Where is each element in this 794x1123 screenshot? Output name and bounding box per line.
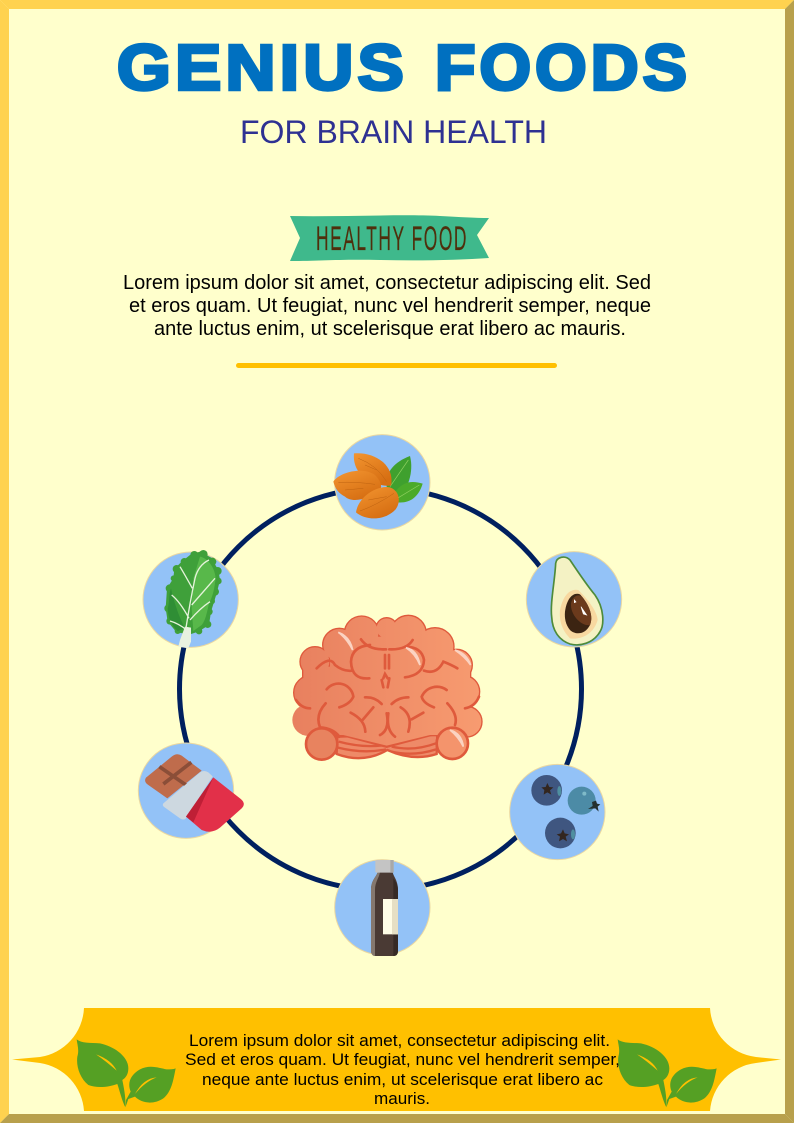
footer panel	[12, 1008, 781, 1111]
intro text block	[123, 272, 651, 340]
title: GENIUS	[117, 32, 408, 104]
intro text block: et eros quam. Ut feugiat, nunc vel hendrerit semper, neque	[129, 295, 651, 317]
footer text: Lorem ipsum dolor sit amet, consectetur adipiscing elit.	[189, 1031, 610, 1050]
banner: healthy food	[290, 215, 489, 261]
food: avocado	[526, 552, 622, 647]
subtitle: FOR BRAIN HEALTH	[240, 114, 547, 150]
icon: right leaves	[618, 1039, 717, 1107]
food: almonds	[333, 435, 430, 530]
icon: brain	[292, 616, 481, 760]
icon: left leaves	[77, 1039, 176, 1107]
title	[117, 32, 691, 104]
food: kale leaf	[143, 550, 238, 648]
food: bottle	[335, 860, 430, 956]
footer text: neque ante luctus enim, ut scelerisque erat libero ac	[202, 1070, 603, 1089]
title: FOODS	[435, 32, 691, 104]
footer text: Sed et eros quam. Ut feugiat, nunc vel hendrerit semper,	[185, 1050, 620, 1069]
food: chocolate bar	[138, 743, 244, 838]
divider line	[236, 363, 557, 368]
footer text	[185, 1031, 620, 1108]
footer text: mauris.	[374, 1089, 430, 1108]
intro text block: Lorem ipsum dolor sit amet, consectetur adipiscing elit. Sed	[123, 272, 651, 294]
ring connecting foods	[180, 488, 582, 890]
banner: healthy food: HEALTHY FOOD	[316, 220, 468, 258]
food: blueberries	[510, 764, 605, 860]
intro text block: ante luctus enim, ut scelerisque erat libero ac mauris.	[154, 318, 626, 340]
